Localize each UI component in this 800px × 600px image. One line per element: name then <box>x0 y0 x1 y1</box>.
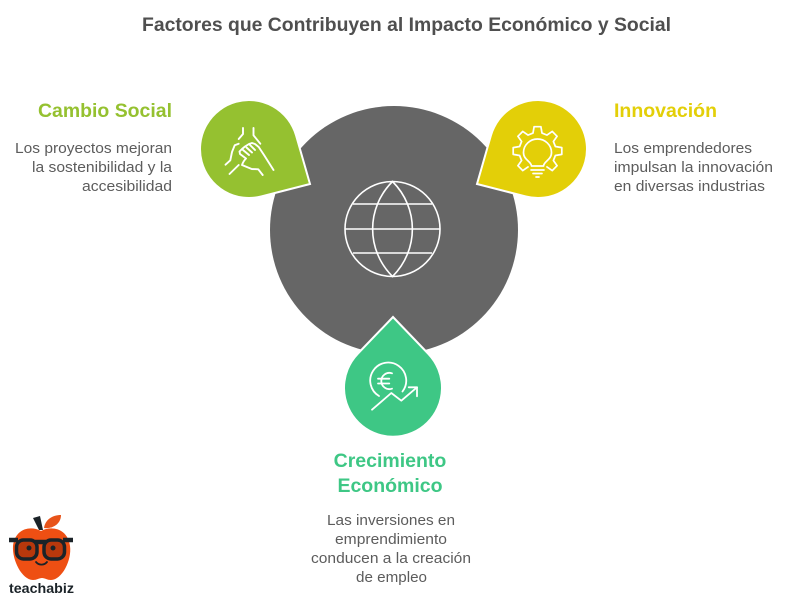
text block: Innovación: impulsan la innovación <box>614 159 773 176</box>
logo wordmark: teachabiz <box>9 580 74 596</box>
text block: Crecimiento Económico: de empleo <box>356 569 427 586</box>
text block: Crecimiento Económico: Las inversiones en <box>327 512 455 529</box>
icon: apple stem <box>33 516 43 530</box>
panel: Innovación drop <box>477 100 587 198</box>
heading: Innovación: Innovación <box>614 100 717 122</box>
icon: euro coin with rising arrow <box>370 363 417 410</box>
text block: Crecimiento Económico <box>311 512 471 586</box>
title: Factores que Contribuyen al Impacto Económico y Social <box>142 15 671 36</box>
text block: Crecimiento Económico: emprendimiento <box>335 531 447 548</box>
text block: Innovación <box>614 140 773 195</box>
text block: Cambio Social <box>15 140 173 195</box>
icon: gear with light bulb <box>513 127 562 177</box>
heading: Crecimiento Económico <box>334 450 446 497</box>
logo: teachabiz apple <box>9 515 74 596</box>
icon: glasses <box>16 540 64 559</box>
panel: Cambio Social drop <box>200 100 310 198</box>
text block: Crecimiento Económico: conducen a la creación <box>311 550 471 567</box>
icon: joined hands <box>226 128 274 175</box>
text block: Innovación: Los emprendedores <box>614 140 752 157</box>
text block: Cambio Social: Los proyectos mejoran <box>15 140 172 157</box>
heading: Cambio Social: Cambio Social <box>38 100 172 122</box>
icon: apple leaf <box>44 515 61 528</box>
icon: smile <box>36 562 47 565</box>
heading: Crecimiento Económico: Crecimiento <box>334 450 446 472</box>
central grey circle with globe <box>270 106 518 354</box>
text block: Cambio Social: accesibilidad <box>82 178 172 195</box>
heading: Crecimiento Económico: Económico <box>337 475 443 497</box>
icon: globe <box>345 182 440 276</box>
panel: Crecimiento Económico drop <box>344 317 442 437</box>
icon: apple body <box>13 528 70 580</box>
text block: Cambio Social: la sostenibilidad y la <box>32 159 173 176</box>
text block: Innovación: en diversas industrias <box>614 178 765 195</box>
